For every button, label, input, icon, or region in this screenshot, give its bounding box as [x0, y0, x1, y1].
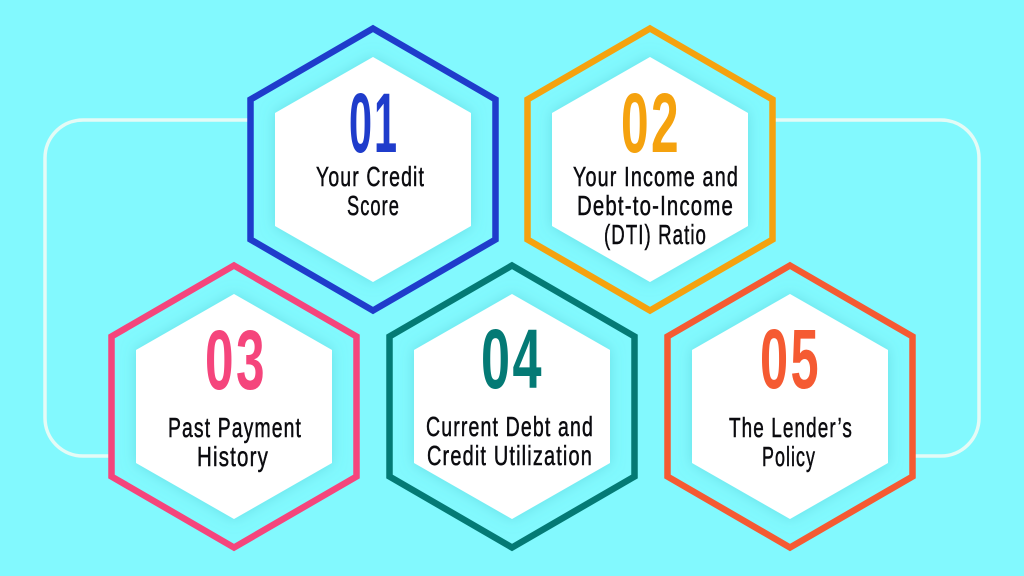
hexagon 01: Your Credit Score: [250, 28, 496, 310]
hexagon 04 frame: [390, 266, 634, 548]
label 04: Credit Utilization: [427, 440, 593, 471]
label 05: The Lender’s: [729, 412, 853, 443]
hexagon 03 frame: [112, 266, 356, 548]
label 05: [729, 412, 853, 472]
label 04: Current Debt and: [426, 411, 594, 442]
hexagon 01: Your Credit Score: 01: [349, 76, 399, 170]
hexagon 02 white core: [552, 57, 748, 282]
hexagon 05 white core: [692, 294, 888, 519]
label 03: Past Payment: [168, 412, 302, 443]
connector outline: [45, 120, 979, 456]
hexagon 03: Past Payment History: [112, 266, 356, 548]
label 03: [168, 412, 302, 472]
hexagon 01 white core: [275, 57, 471, 282]
label 02: [573, 161, 739, 250]
hexagon 05: The Lender's Policy: [668, 266, 912, 548]
hexagon 04: Current Debt and Credit Utilization: [390, 266, 634, 548]
hexagon 02 frame: [528, 28, 772, 310]
hexagon 02: Your Income and DTI Ratio: [528, 28, 772, 310]
label 02: Debt-to-Income: [577, 190, 734, 221]
label 01: Score: [347, 190, 400, 221]
label 02: (DTI) Ratio: [604, 219, 707, 250]
label 02: Your Income and: [573, 161, 739, 192]
hexagon 01 frame: [250, 28, 496, 310]
label 01: [316, 161, 425, 221]
number 05: 05: [760, 312, 821, 406]
number 04: 04: [481, 312, 544, 406]
number 03: 03: [205, 313, 267, 407]
number 02: 02: [621, 76, 681, 170]
label 04: [426, 411, 594, 471]
label 05: Policy: [762, 441, 816, 472]
label 03: History: [197, 441, 269, 472]
hexagon 03 white core: [136, 294, 332, 519]
hexagon 05 frame: [668, 266, 912, 548]
hexagon 04 white core: [414, 294, 610, 519]
label 01: Your Credit: [316, 161, 425, 192]
